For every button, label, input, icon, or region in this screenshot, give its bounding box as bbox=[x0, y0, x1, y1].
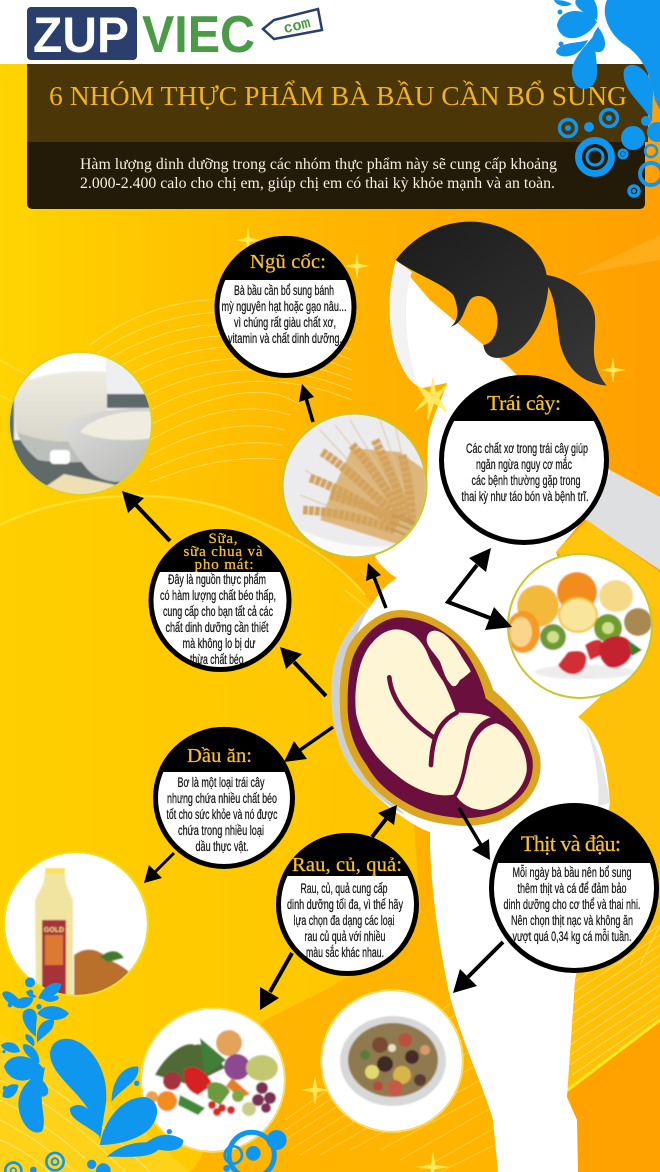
intro text: 2.000-2.400 calo cho chị em, giúp chị em có thai kỳ khỏe mạnh và an toàn. bbox=[80, 175, 555, 192]
arrow: oil circle to bottle bbox=[144, 853, 174, 883]
text: vegetables: dinh dưỡng tối đa, vì thế hãy bbox=[287, 897, 403, 912]
heading: dairy: pho mát: bbox=[194, 557, 254, 573]
logo: VIEC bbox=[142, 6, 255, 64]
photo: milk and yogurt bbox=[10, 353, 151, 494]
text: cooking oil bbox=[166, 775, 278, 854]
text: vegetables: lựa chọn đa dạng các loại bbox=[294, 913, 394, 928]
text: dairy: chất dinh dưỡng cần thiết bbox=[166, 620, 269, 635]
heading: vegetables: Rau, củ, quả: bbox=[292, 854, 402, 876]
arrow: belly to dairy circle bbox=[280, 647, 326, 696]
header panel bbox=[27, 64, 648, 209]
text: cooking oil: Bơ là một loại trái cây bbox=[178, 775, 265, 790]
heading: grains: Ngũ cốc: bbox=[250, 251, 326, 273]
logo: ZUP bbox=[33, 7, 129, 63]
intro text: Hàm lượng dinh dưỡng trong các nhóm thực phẩm này sẽ cung cấp khoảng bbox=[80, 156, 557, 173]
arrow: wheat to grains circle bbox=[299, 384, 314, 422]
text: dairy: mà không lo bị dư bbox=[182, 636, 256, 651]
heading: cooking oil: Dầu ăn: bbox=[187, 745, 252, 767]
text: vegetables: màu sắc khác nhau. bbox=[306, 945, 384, 960]
text: fruit bbox=[462, 441, 588, 504]
photo ring: oil bbox=[4, 852, 148, 996]
text: dairy: có hàm lượng chất béo thấp, bbox=[160, 588, 276, 603]
grey sleeve band bbox=[585, 470, 660, 570]
arrow: meat circle to salad bbox=[453, 942, 503, 993]
circle: meat and beans bbox=[492, 803, 656, 970]
intro text bbox=[80, 156, 557, 192]
photo: oil bottle: GOLD bbox=[44, 927, 64, 934]
text: fruit: ngăn ngừa nguy cơ mắc bbox=[476, 457, 572, 472]
arrow: belly to wheat bbox=[366, 563, 386, 608]
photo: wheat bbox=[284, 414, 426, 556]
arrow: womb to meat circle bbox=[459, 808, 490, 860]
woman silhouette bbox=[332, 260, 610, 1172]
text: grains: mỳ nguyên hạt hoặc gạo nâu... bbox=[222, 299, 346, 314]
arrow: elbow to fruit circle and fruit bbox=[448, 548, 512, 630]
photo ring: salad bbox=[321, 990, 463, 1132]
text: vegetables: rau củ quả với nhiều bbox=[304, 929, 386, 944]
photo ring: milk bbox=[9, 352, 152, 495]
photo: fruit bbox=[509, 555, 651, 694]
text: grains: Bà bầu cần bổ sung bánh bbox=[234, 283, 334, 298]
text: grains bbox=[222, 283, 346, 346]
text: dairy: thừa chất béo. bbox=[190, 652, 246, 667]
circle: vegetables bbox=[278, 833, 416, 974]
text: cooking oil: nhưng chứa nhiều chất béo bbox=[167, 791, 277, 806]
blue splash: top right bbox=[554, 0, 660, 196]
arrow: dairy circle to milk bbox=[122, 491, 170, 541]
text: cooking oil: chứa trong nhiều loại bbox=[178, 823, 264, 838]
text: fruit: các bệnh thường gặp trong bbox=[472, 473, 580, 488]
arrow: vegetable circle to womb bbox=[372, 805, 397, 837]
photo ring: vegetables bbox=[141, 1008, 285, 1152]
text: grains: vì chúng rất giàu chất xơ, bbox=[234, 315, 336, 330]
fine arc lines bbox=[90, 299, 352, 482]
text: dairy bbox=[160, 572, 276, 667]
text: cooking oil: tốt cho sức khỏe và nó được bbox=[166, 807, 278, 822]
logo bbox=[27, 6, 322, 64]
arrow: belly to oil circle bbox=[284, 727, 333, 762]
yellow patterned stripe bbox=[556, 520, 660, 610]
header band bbox=[0, 0, 660, 64]
photo ring: wheat bbox=[282, 414, 426, 558]
heading: dairy: sữa chua và bbox=[184, 544, 263, 560]
heading: fruit: Trái cây: bbox=[487, 391, 561, 415]
text: meat and beans bbox=[504, 865, 640, 944]
photo: oil bottle bbox=[5, 853, 147, 995]
heading: dairy: Sữa, bbox=[208, 531, 238, 547]
hair and ponytail bbox=[396, 222, 607, 386]
text: cooking oil: dầu thực vật. bbox=[196, 839, 248, 854]
text: dairy: Đây là nguồn thực phẩm bbox=[168, 572, 266, 587]
heading: dairy bbox=[184, 531, 263, 573]
text: vegetables bbox=[287, 881, 403, 960]
text: grains: vitamin và chất dinh dưỡng. bbox=[228, 331, 342, 346]
photo ring: fruit bbox=[508, 554, 652, 698]
text: fruit: thai kỳ như táo bón và bệnh trĩ. bbox=[462, 489, 588, 504]
circle: dairy bbox=[151, 529, 289, 670]
text: fruit: Các chất xơ trong trái cây giúp bbox=[466, 441, 588, 456]
circle: grains bbox=[217, 236, 354, 376]
title: 6 NHÓM THỰC PHẨM BÀ BẦU CẦN BỔ SUNG bbox=[49, 80, 627, 111]
blue splash: bottom left bbox=[1, 977, 287, 1172]
logo tag bbox=[263, 9, 322, 39]
photo: vegetables bbox=[140, 1006, 288, 1154]
circle: cooking oil bbox=[156, 727, 292, 866]
text: vegetables: Rau, củ, quả cung cấp bbox=[300, 881, 388, 896]
text: dairy: cung cấp cho bạn tất cả các bbox=[163, 604, 273, 619]
fetus in womb bbox=[340, 610, 541, 826]
arrows bbox=[122, 384, 512, 1010]
logo tag: com bbox=[282, 15, 312, 38]
circle: fruit bbox=[442, 375, 606, 542]
photo: salad bbox=[320, 988, 465, 1134]
sparkle stars bbox=[236, 228, 625, 1172]
heading: meat and beans: Thịt và đậu: bbox=[521, 831, 621, 856]
arrow: vegetable circle to vegetables bbox=[260, 953, 292, 1010]
